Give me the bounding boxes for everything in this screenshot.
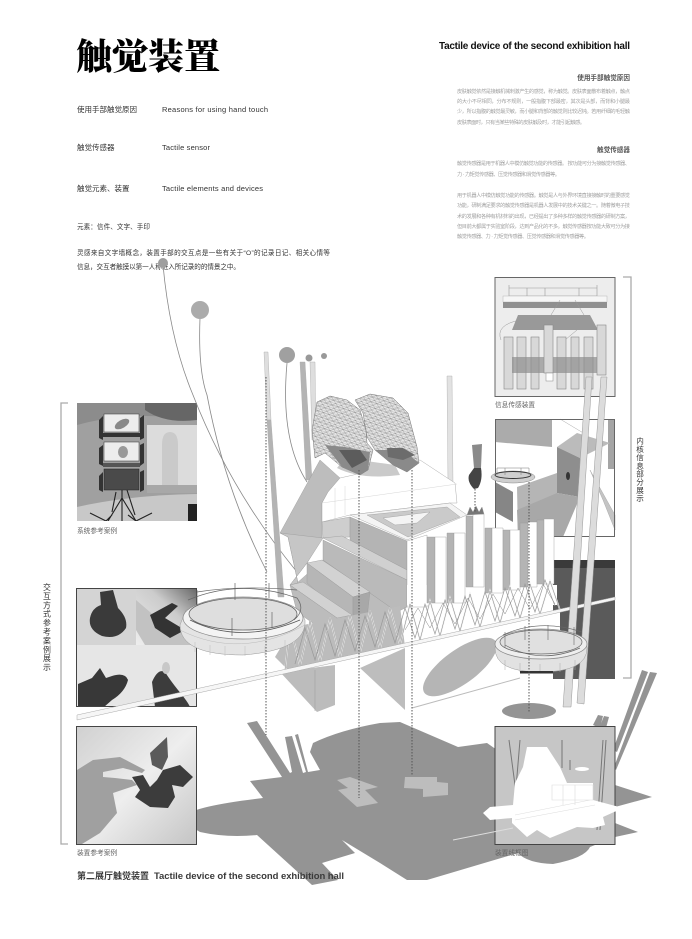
right text column: 功能，研制满足要求的触觉传感器是机器人发展中的技术关键之一。随着微电子技: [457, 201, 630, 209]
right text column: 触觉传感器是用于机器人中模仿触觉功能的传感器。 按功能可分为接触觉传感器、: [457, 159, 630, 167]
right text column: 皮肤表面时，只有当某些特殊的皮肤触及时，才能引起触感。: [457, 118, 585, 126]
thin curves and poles: [163, 265, 307, 572]
inspiration text: [77, 222, 330, 271]
caption: wireframe: 装置线框图: [495, 848, 529, 857]
right text column: 的大小不尽相同，分布不规则，一般指腹下部最密，其次是头部，而背和小腿最: [457, 97, 630, 105]
ground ellipse: [502, 703, 556, 719]
floor shadow: [185, 670, 657, 885]
subtitle english: Tactile device of the second exhibition hall: [439, 41, 630, 52]
right text column: 皮肤触觉依然是接触机械刺激产生的感觉，称为触觉。皮肤表面散布着触点，触点: [457, 87, 630, 95]
inspiration text: 信息，交互者触摸以第一人称进入所记录的的情景之中。: [77, 262, 240, 271]
title: 触觉装置: [76, 37, 220, 77]
right text column: 术的发展和各种有机材料的出现，已经提出了多种多样的触觉传感器的研制方案，: [457, 212, 630, 220]
photo: system reference: [77, 403, 197, 521]
hands mesh: [312, 394, 419, 476]
photo: hand quadrants: [77, 589, 196, 706]
right text column: 用于机器人中模仿触觉功能的传感器。触觉是人与外界环境直接接触时的重要感觉: [457, 191, 630, 199]
right text column: 触觉传感器: [597, 145, 630, 154]
panel: sensor diagram: [495, 278, 615, 396]
platform left: [180, 583, 305, 656]
section list left: Reasons for using hand touch: [162, 105, 268, 114]
photo: device reference butterfly: [77, 727, 196, 844]
section list left: 使用手部触觉原因: [77, 104, 137, 114]
right text column: 触觉传感器、力 · 力矩觉传感器、压觉传感器和滑觉传感器等。: [457, 232, 589, 240]
circle: large: [191, 301, 209, 319]
floor plane band: [77, 597, 615, 720]
main building: [280, 460, 557, 650]
footer caption: [77, 870, 344, 882]
dotted drop lines: [266, 377, 529, 798]
section list left: 触觉元素、装置: [77, 183, 130, 193]
left bracket: [61, 403, 68, 844]
right text column: 但目前大都属于实验室阶段，达到产品化的不多。触觉传感器按功能大致可分为接: [457, 222, 630, 230]
panel: wireframe view: [453, 726, 623, 844]
right text column: 使用手部触觉原因: [577, 73, 630, 82]
circle: top: [158, 258, 168, 268]
caption: system reference: 系统参考案例: [77, 526, 117, 535]
circle: medium: [279, 347, 295, 363]
caption: sensor diagram: 信息传感装置: [495, 400, 535, 409]
right bracket: [623, 277, 631, 678]
lower body wedges: [280, 612, 560, 712]
right text column: 力 · 力矩觉传感器、压觉传感器和滑觉传感器等。: [457, 170, 560, 178]
panel: core detail view: [495, 419, 615, 537]
platform right: [495, 625, 587, 674]
inspiration text: 元素：信件、文字、手印: [77, 222, 150, 231]
section list left: 触觉传感器: [77, 142, 115, 152]
right support beams: [563, 377, 607, 707]
circle: small right: [321, 353, 327, 359]
caption: device reference: 装置参考案例: [77, 848, 117, 857]
inspiration text: 灵感来自文字墙概念，装置手部的交互点是一些有关于“O”的记录日记、相关心情等: [77, 248, 330, 257]
poles: [264, 352, 453, 597]
section list left: Tactile elements and devices: [162, 184, 263, 193]
section list left: [77, 104, 268, 193]
columns: [427, 506, 554, 603]
photo frame: hand quadrants: [76, 588, 196, 706]
circle: small: [306, 354, 312, 362]
wall shadow ellipse: [414, 627, 506, 707]
photo frame: device reference: [76, 726, 196, 844]
small tower platform: [491, 468, 535, 483]
right text column: 少，所以指腹的触觉最灵敏，而小腿和背部的触觉则比较迟钝。若用纤细的毛轻触: [457, 107, 631, 115]
panel: dark backdrop: [553, 560, 615, 679]
truss: [275, 580, 560, 672]
right text column: [457, 73, 631, 240]
left vertical label: 交互方式参考案例展示: [42, 582, 52, 672]
hand: small pointing: [469, 444, 482, 489]
footer caption: Tactile device of the second exhibition hall: [154, 871, 344, 882]
section list left: Tactile sensor: [162, 143, 210, 152]
footer caption: 第二展厅触觉装置: [77, 870, 149, 881]
right vertical label: 内核信息部分展示: [635, 436, 644, 503]
floor light patches: [337, 777, 448, 807]
